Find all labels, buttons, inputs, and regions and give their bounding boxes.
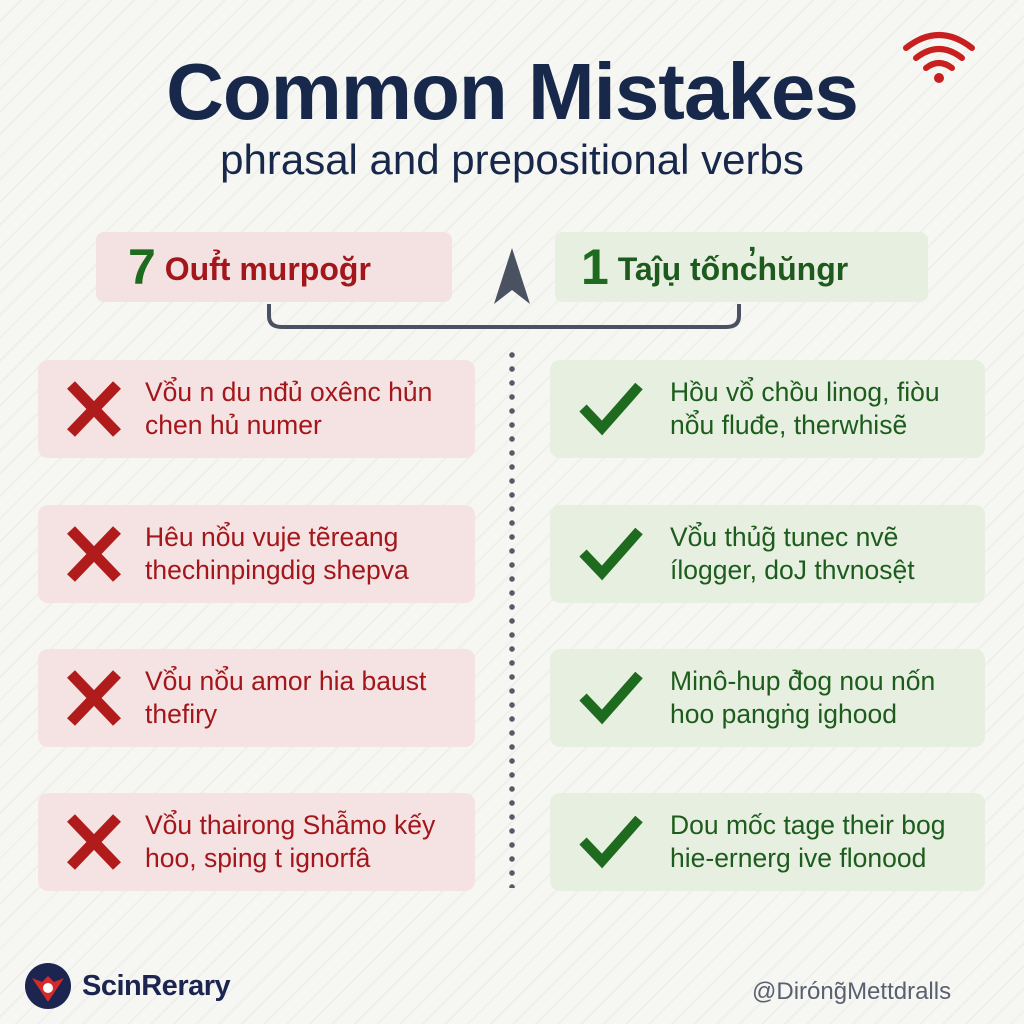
card: mistake 4: Vồ̉u thairong Shẫmo kếy	[145, 810, 435, 840]
card: correct 2: ílogger, doJ thvnosệt	[670, 555, 915, 585]
icon: wifi	[903, 32, 975, 83]
card: correct 1: nồ̉u fluđe, therwhisẽ	[670, 410, 907, 440]
bracket	[267, 304, 741, 329]
card: mistake 4: hoo, sping t ignorfâ	[145, 843, 370, 873]
card: correct 2	[550, 505, 985, 603]
title: Common Mistakes	[166, 47, 858, 136]
header: mistakes	[96, 232, 452, 302]
card: mistake 3	[38, 649, 475, 747]
subtitle: phrasal and prepositional verbs	[220, 136, 804, 183]
brand name: ScinRerary	[82, 970, 230, 1002]
card: mistake 3: Vồ̉u nồ̉u amor hia baust	[145, 666, 426, 696]
card: correct 4	[550, 793, 985, 891]
card: correct 4: Dou mốc tage their bog	[670, 810, 945, 840]
card: mistake 2: Hêu nồ̉u vuje tẽreang	[145, 522, 398, 552]
card: mistake 2: thechinpingdig shepva	[145, 555, 409, 585]
divider dotted	[509, 348, 515, 888]
card: mistake 1: Vồ̉u n du nđủ oxênc hủn	[145, 377, 432, 407]
card: mistake 2	[38, 505, 475, 603]
card: correct 4: hie-ernerg ive flonood	[670, 843, 926, 873]
card: mistake 1: chen hủ numer	[145, 410, 322, 440]
footer logo	[25, 963, 230, 1009]
card: correct 3	[550, 649, 985, 747]
card: mistake 3: thefiry	[145, 699, 217, 729]
card: correct 1: Hồu vồ̉ chồu linog, fiòu	[670, 377, 940, 407]
card: mistake 1	[38, 360, 475, 458]
handle: @Diróng̃Mettdralls	[752, 978, 951, 1005]
card: correct 2: Vồ̉u thủg̃ tunec nvẽ	[670, 522, 898, 552]
arrow	[494, 248, 530, 304]
icon: logo mark	[25, 963, 71, 1009]
card: correct 1	[550, 360, 985, 458]
card: mistake 4	[38, 793, 475, 891]
card: correct 3: hoo pangṅg ighood	[670, 699, 897, 729]
card: correct 3: Minô-hup đ̉og nou nốn	[670, 666, 935, 696]
header: mistakes: 7 Ouf̉t murpoğr	[128, 239, 371, 295]
header: correct: 1 Taĵụ tốnc̓hŭngr	[581, 239, 848, 295]
header: correct	[555, 232, 928, 302]
